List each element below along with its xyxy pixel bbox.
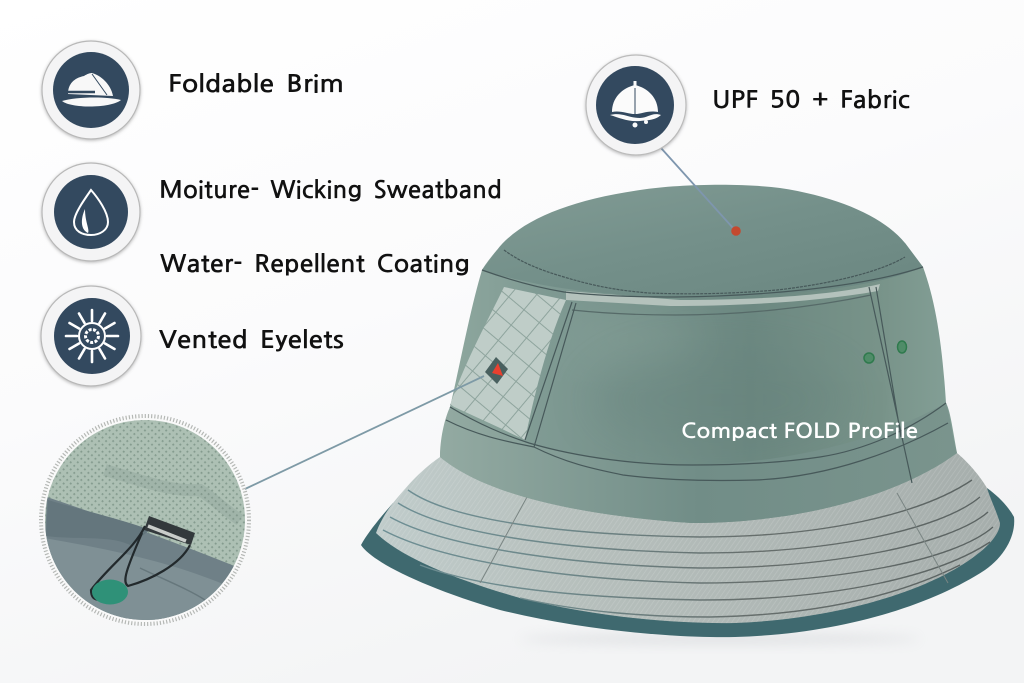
feature: Moisture-Wicking Sweatband: [42, 163, 502, 261]
icon: foldable hat: [42, 41, 140, 139]
feature: Vented Eyelets: [41, 286, 344, 386]
feature: UPF 50+ Fabric: [586, 55, 910, 155]
red crown dot: [731, 226, 741, 236]
fabric shading: [560, 314, 850, 450]
label: Moiture- Wicking Sweatband: [159, 178, 502, 202]
label: Compact Fold Profile: Compact FOLD ProFile: [681, 421, 918, 442]
label: UPF 50 + Fabric: [712, 88, 910, 112]
lower band: [440, 403, 957, 523]
label: Water-Repellent Coating: Water- Repellent Coating: [160, 252, 470, 276]
reflective stripe: [566, 284, 880, 306]
icon: green eyelets: [864, 341, 906, 363]
crown dome: [482, 185, 923, 297]
red marker badge: [485, 357, 508, 384]
toggle clip: [91, 516, 195, 604]
hat crown: [440, 185, 957, 523]
mesh vent panel: [450, 287, 566, 440]
hat brim: [361, 453, 1014, 637]
label: Vented Eyelets: [159, 328, 344, 352]
callout line: detail lens to marker: [245, 376, 484, 489]
icon: water drop: [42, 163, 140, 261]
callout line: UPF icon to crown: [661, 148, 733, 228]
icon: vent wheel: [41, 286, 141, 386]
label: Foldable Brim: [168, 72, 344, 96]
detail lens: [40, 415, 250, 640]
bucket hat illustration: [361, 185, 1014, 644]
feature: Foldable Brim: [42, 41, 344, 139]
icon: dome with pin: [586, 55, 686, 155]
